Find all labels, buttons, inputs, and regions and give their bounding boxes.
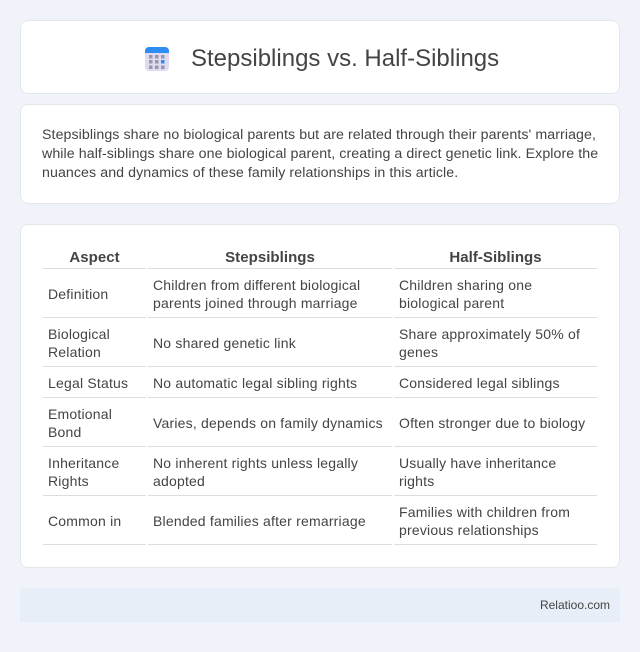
row: emotional bond: Emotional bbox=[48, 406, 112, 422]
row: common in: previous relationships bbox=[399, 522, 539, 538]
row: biological relation: Biological bbox=[48, 326, 110, 342]
row: definition: parents joined through marriage bbox=[153, 295, 358, 311]
row: biological relation: Relation bbox=[48, 344, 101, 360]
intro text: nuances and dynamics of these family relationships in this article. bbox=[42, 165, 458, 181]
footer text: Relatioo.com bbox=[540, 598, 610, 612]
row: inheritance rights: Usually have inheritance bbox=[399, 455, 556, 471]
footer bar bbox=[20, 588, 620, 622]
row: common in bbox=[43, 504, 597, 545]
comparison table bbox=[43, 249, 597, 545]
panel: comparison table bbox=[20, 224, 620, 568]
table header: Half-Siblings bbox=[449, 249, 542, 266]
row: emotional bond bbox=[43, 406, 597, 447]
panel: title bbox=[20, 20, 620, 94]
row: inheritance rights: No inherent rights unless legally bbox=[153, 455, 358, 471]
row: definition bbox=[43, 277, 597, 318]
row: inheritance rights: rights bbox=[399, 473, 434, 489]
row: common in: Blended families after remarriage bbox=[153, 513, 366, 529]
row: biological relation: Share approximately 50% of bbox=[399, 326, 580, 342]
row: biological relation: No shared genetic link bbox=[153, 335, 296, 351]
row: definition: biological parent bbox=[399, 295, 504, 311]
row: definition: Children sharing one bbox=[399, 277, 532, 293]
row: common in: Families with children from bbox=[399, 504, 570, 520]
row: legal status: No automatic legal sibling rights bbox=[153, 375, 357, 391]
row: emotional bond: Often stronger due to biology bbox=[399, 415, 585, 431]
row: legal status bbox=[43, 375, 597, 398]
row: common in: Common in bbox=[48, 513, 121, 529]
row: emotional bond: Varies, depends on family dynamics bbox=[153, 415, 383, 431]
row: inheritance rights: Rights bbox=[48, 473, 89, 489]
row: definition: Definition bbox=[48, 286, 108, 302]
table header: Stepsiblings bbox=[225, 249, 315, 266]
row: inheritance rights: Inheritance bbox=[48, 455, 119, 471]
intro text bbox=[42, 127, 598, 181]
row: legal status: Legal Status bbox=[48, 375, 128, 391]
row: legal status: Considered legal siblings bbox=[399, 375, 560, 391]
row: inheritance rights: adopted bbox=[153, 473, 205, 489]
icon: calendar bbox=[145, 47, 169, 71]
row: definition: Children from different biological bbox=[153, 277, 360, 293]
panel: introduction bbox=[20, 104, 620, 204]
row: biological relation bbox=[43, 326, 597, 367]
table header bbox=[43, 249, 597, 269]
row: biological relation: genes bbox=[399, 344, 438, 360]
row: inheritance rights bbox=[43, 455, 597, 496]
intro text: while half-siblings share one biological parent, creating a direct genetic link. Explore the bbox=[42, 146, 598, 162]
row: emotional bond: Bond bbox=[48, 424, 82, 440]
title text: Stepsiblings vs. Half-Siblings bbox=[191, 45, 499, 72]
intro text: Stepsiblings share no biological parents but are related through their parents' marriage, bbox=[42, 127, 596, 143]
table header: Aspect bbox=[69, 249, 120, 266]
